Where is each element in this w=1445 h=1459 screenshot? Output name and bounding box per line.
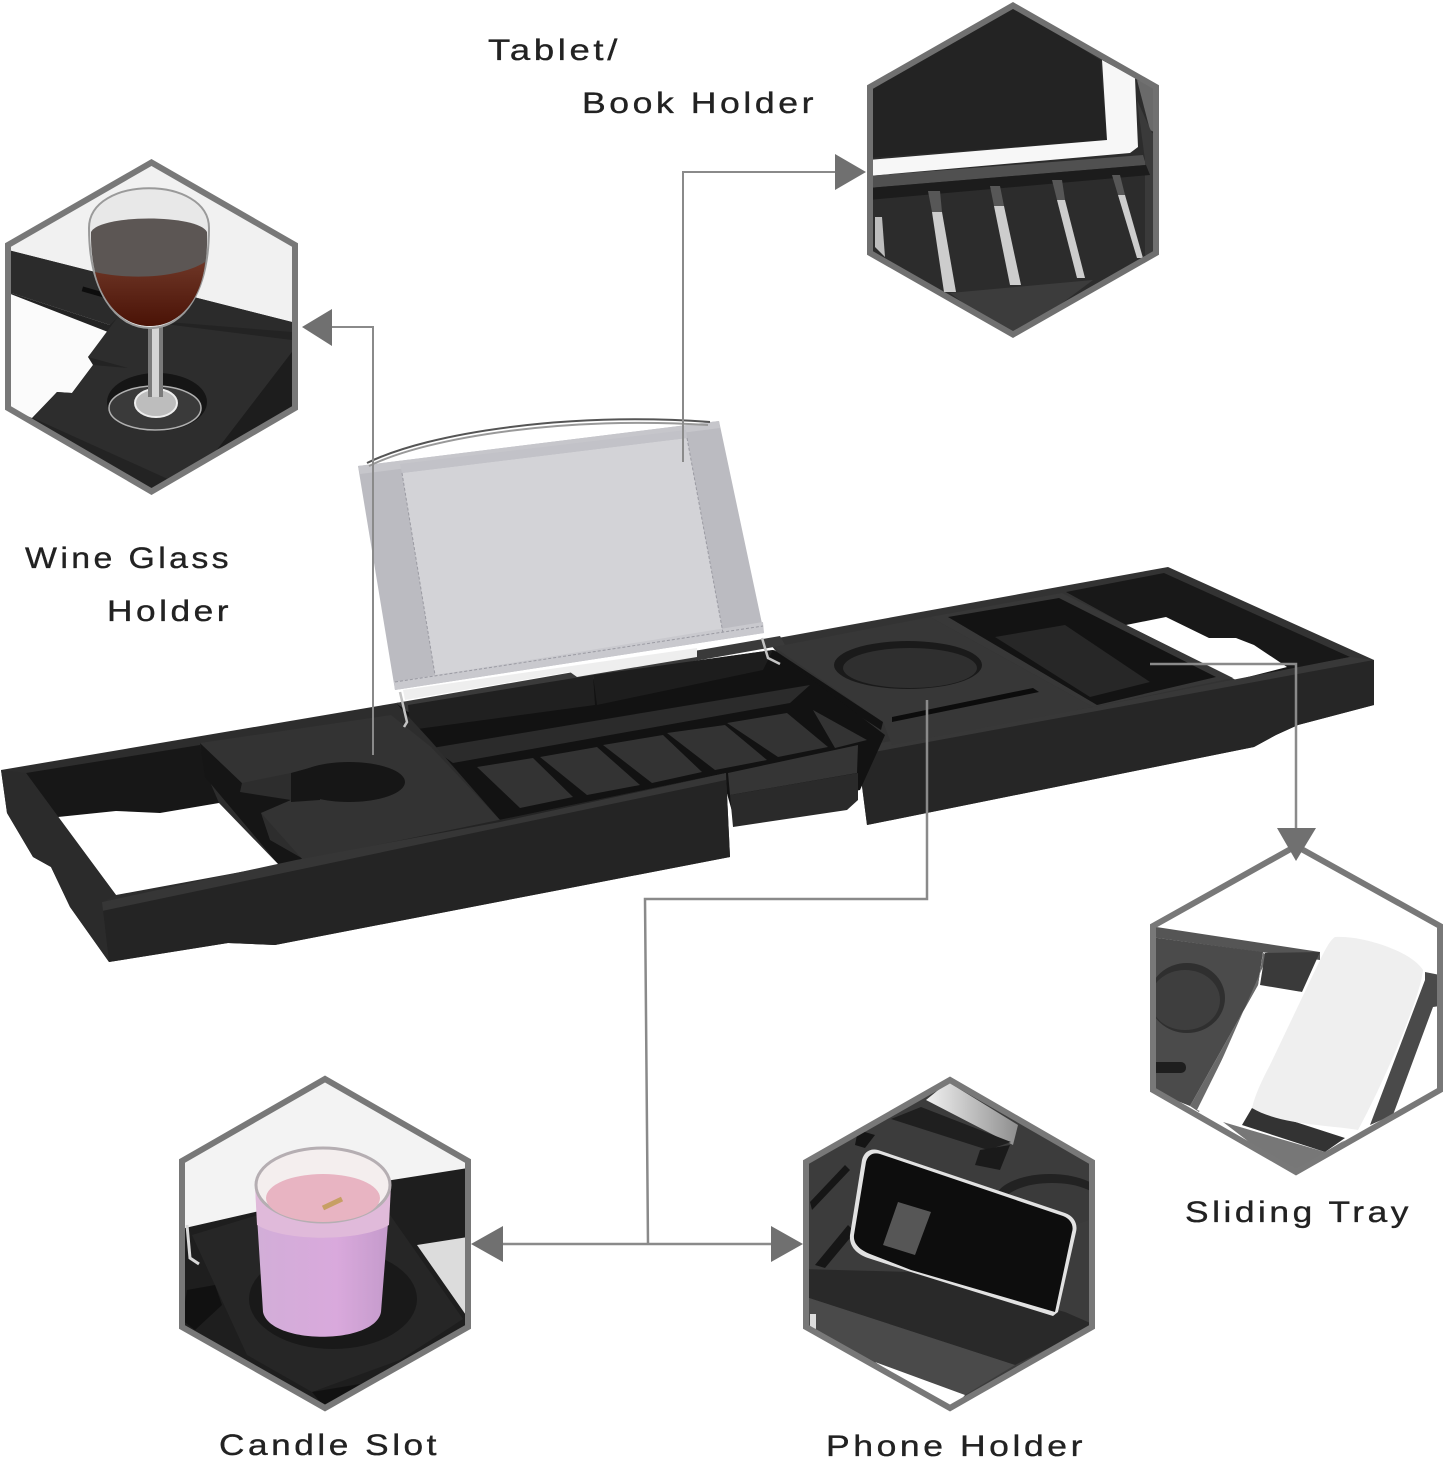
arrow: sliding tray (1150, 664, 1316, 861)
hexagon: wine glass holder (0, 150, 300, 500)
hexagon: sliding tray (1145, 840, 1445, 1180)
label: Tablet/Book Holder (488, 34, 817, 120)
bath tray: main product (1, 567, 1374, 962)
icon: rolled towel (1252, 937, 1423, 1130)
book holder sheet (358, 419, 780, 727)
icon: wine glass (89, 188, 209, 417)
label: Sliding Tray: Sliding Tray (1185, 1196, 1412, 1229)
centre slats and rails (396, 636, 885, 827)
hexagon frame (870, 6, 1156, 334)
arrow: wine glass holder (302, 309, 373, 755)
candle plate with round recess (765, 617, 1093, 745)
arrows: candle slot and phone holder (471, 700, 927, 1262)
arrow: tablet holder (683, 154, 866, 462)
hexagon frame (1153, 846, 1440, 1172)
label: Tablet/Book Holder: Book Holder (582, 87, 817, 120)
hexagon: candle slot (175, 1070, 475, 1415)
label: Tablet/Book Holder: Tablet/ (488, 34, 621, 67)
hexagon frame (806, 1080, 1092, 1408)
hexagon: phone holder (800, 1075, 1105, 1415)
right tray section (767, 567, 1374, 825)
label: Wine Glass Holder (25, 542, 232, 628)
hexagon: tablet holder (860, 0, 1160, 340)
hexagon frame (182, 1079, 468, 1408)
label: Wine Glass Holder: Wine Glass (25, 542, 232, 575)
label: Wine Glass Holder: Holder (107, 595, 232, 628)
sliding left section (1, 703, 730, 962)
hexagon frame (8, 162, 295, 492)
icon: smartphone (850, 1149, 1077, 1316)
icon: pink candle jar (255, 1148, 391, 1337)
